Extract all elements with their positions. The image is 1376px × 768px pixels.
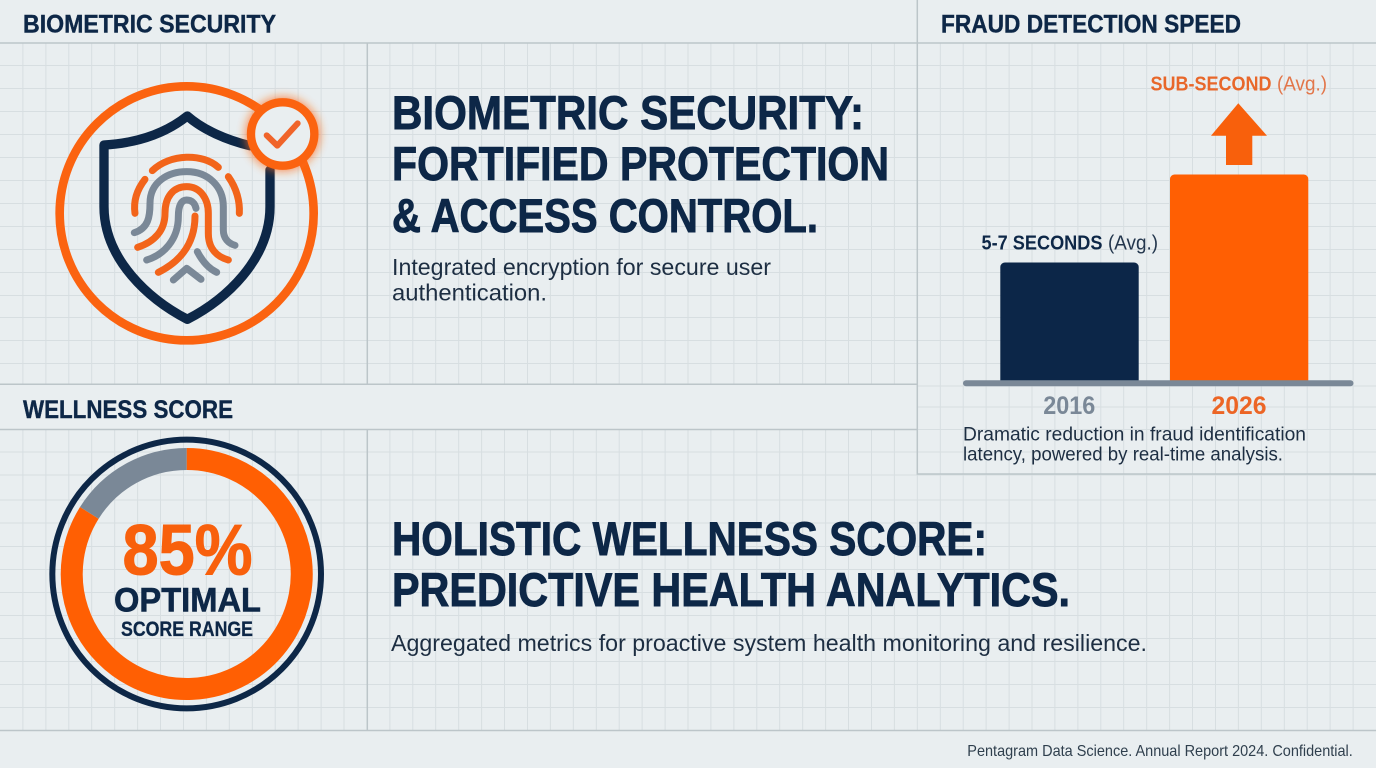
bar: 2026: [1170, 174, 1308, 381]
text: wellness description: Aggregated metrics for proactive system health monitoring and resilience.: [391, 630, 1147, 656]
axis label: 2016: 2016: [1043, 392, 1095, 420]
text: fraud description: latency, powered by real-time analysis.: [963, 444, 1283, 466]
text: biometric description: [392, 254, 771, 306]
panel: wellness score: [23, 396, 1147, 708]
text: fraud description: Dramatic reduction in fraud identification: [963, 424, 1306, 446]
headline: fortified protection: & ACCESS CONTROL.: [392, 189, 818, 242]
heading: biometric security: BIOMETRIC SECURITY: [23, 10, 276, 38]
panel: biometric security: [23, 10, 889, 340]
label: optimal: OPTIMAL: [114, 582, 261, 620]
label: score range: SCORE RANGE: [121, 618, 253, 641]
headline: predictive health analytics: PREDICTIVE HEALTH ANALYTICS.: [392, 563, 1070, 616]
headline: fortified protection: [392, 86, 889, 242]
label: 5-7 seconds: 5-7 SECONDS: [982, 232, 1102, 254]
axis label: 2026: 2026: [1212, 392, 1266, 420]
bar: 2016: [1000, 262, 1139, 381]
icon: shield with fingerprint and check badge: [60, 86, 319, 340]
panel: fraud detection speed: [941, 10, 1354, 466]
label: sub-second: SUB-SECOND: [1150, 74, 1272, 96]
text: biometric description: authentication.: [392, 280, 547, 306]
label: 5-7 seconds: (Avg.): [1108, 232, 1158, 254]
donut chart: 85 percent: [52, 440, 321, 708]
headline: predictive health analytics: [392, 512, 1070, 616]
label: sub-second: (Avg.): [1277, 74, 1327, 96]
headline: fortified protection: FORTIFIED PROTECTION: [392, 137, 889, 190]
axis baseline: [963, 380, 1354, 386]
bar chart: 2016 versus 2026: [963, 74, 1354, 420]
heading: wellness score: WELLNESS SCORE: [23, 396, 233, 424]
text: biometric description: Integrated encryption for secure user: [392, 254, 771, 280]
arrow: upward improvement: [1211, 103, 1267, 165]
heading: fraud detection speed: FRAUD DETECTION SPEED: [941, 10, 1241, 38]
text: fraud description: [963, 424, 1306, 466]
headline: predictive health analytics: HOLISTIC WELLNESS SCORE:: [392, 512, 987, 565]
value: 85%: 85%: [122, 512, 252, 590]
headline: fortified protection: BIOMETRIC SECURITY:: [392, 86, 864, 139]
